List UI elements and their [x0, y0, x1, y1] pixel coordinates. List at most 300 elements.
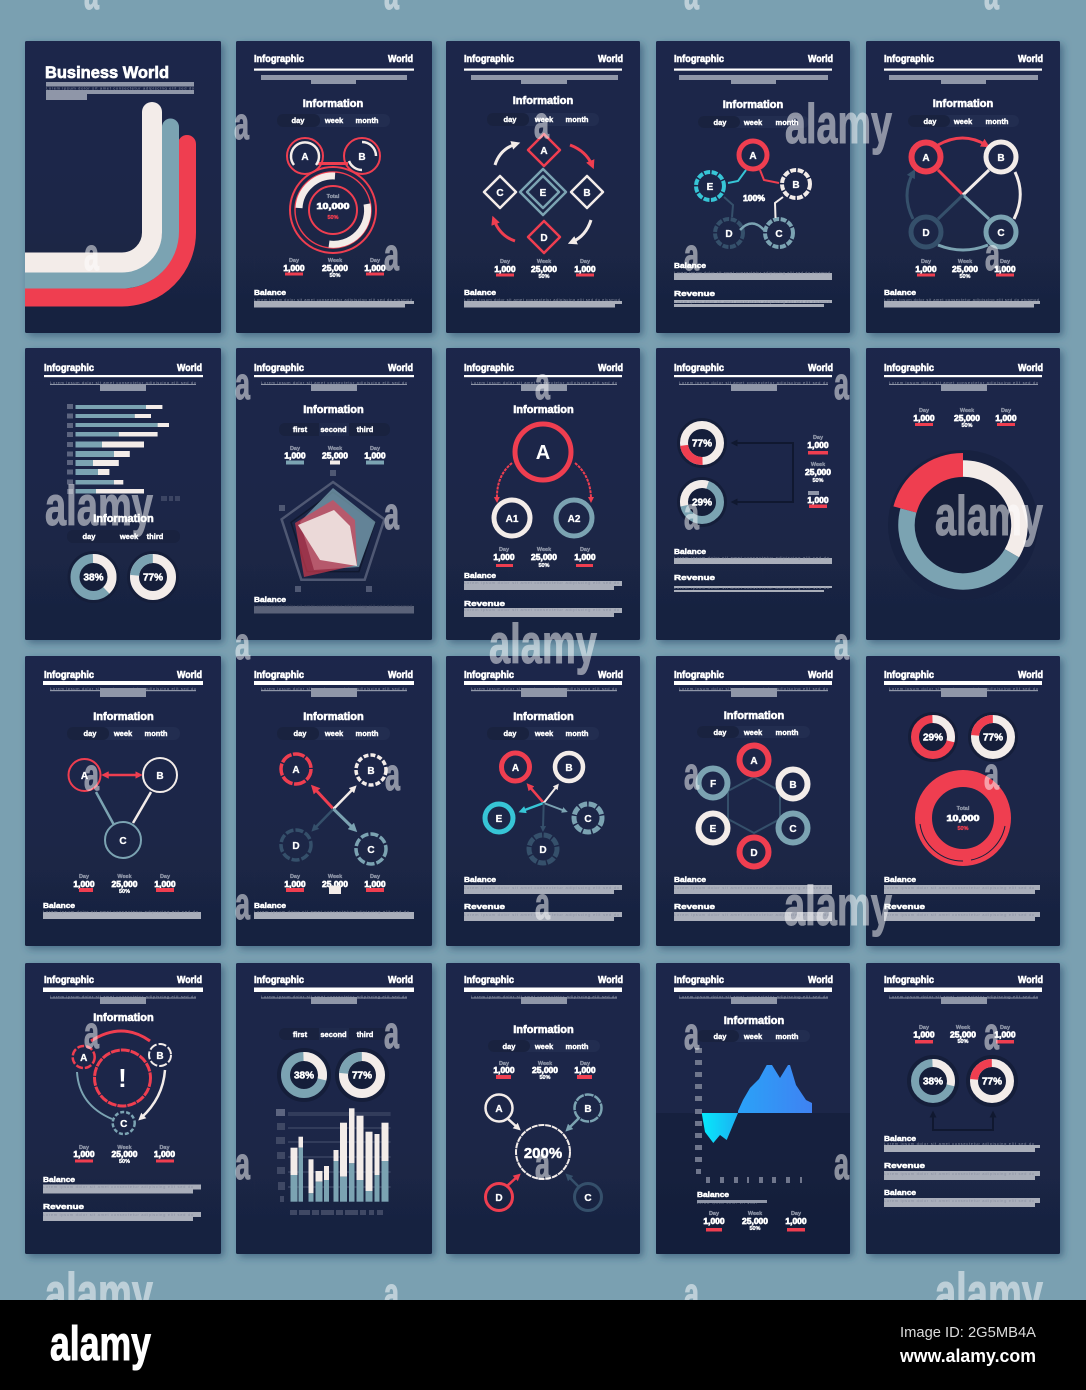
watermarks: alamy [785, 92, 892, 155]
card background [866, 41, 1060, 333]
stats trio [284, 874, 386, 894]
text: Revenue: Revenue [884, 1161, 925, 1170]
darker lower section [656, 1113, 850, 1254]
donut 29%: 29% [923, 732, 943, 744]
header [674, 54, 833, 84]
stats trio: Day [709, 1211, 720, 1217]
watermarks: a [834, 1138, 850, 1189]
text: Balance: Balance [254, 901, 286, 910]
heading: Information: Information [933, 98, 994, 110]
stats trio: 25,000 [531, 264, 557, 274]
diagram: hexagon: D [750, 848, 758, 859]
panel: two donuts with connector [656, 348, 850, 640]
text: Balance [464, 288, 622, 308]
stats trio: 1,000 [994, 1030, 1016, 1040]
header: Infographic [254, 975, 304, 986]
donut 29% [677, 477, 727, 527]
card background [25, 348, 221, 640]
panel: donuts and red ring [866, 656, 1060, 946]
watermarks: a [385, 749, 401, 800]
donut 29% [908, 712, 958, 762]
donut 38% [68, 551, 120, 603]
header: World [388, 670, 413, 681]
watermarks: a [535, 358, 551, 409]
card background [656, 963, 850, 1254]
donut 38%: 38% [294, 1070, 314, 1082]
diagram: diamonds: B [583, 188, 591, 199]
donut 29%: 29% [692, 498, 712, 508]
header: Infographic [884, 363, 934, 374]
diagram: circles and ring: 50% [327, 215, 339, 221]
text: Balance 2: Lorem ipsum dolor sit amet consectetur adipiscing elit sed do [884, 1198, 1035, 1203]
donut 77% [127, 551, 179, 603]
text: Revenue: Revenue [43, 1202, 84, 1211]
header: World [598, 363, 623, 374]
text: Revenue [674, 573, 832, 592]
diagram: orbit [73, 1031, 171, 1134]
header: Infographic [464, 670, 514, 681]
heading: Information: Information [93, 711, 154, 723]
header: World [598, 975, 623, 986]
diagram: four circles: C [997, 228, 1005, 239]
tabs: second [320, 1030, 347, 1039]
text: Revenue [464, 902, 622, 921]
header: World [1018, 54, 1043, 65]
text: Balance: Balance [254, 288, 286, 297]
stats trio: 1,000 [574, 1065, 596, 1075]
heading: Information: Information [513, 1024, 574, 1036]
diagram: hub with five circles: E [496, 814, 503, 825]
panel: cross of arrows [236, 656, 432, 946]
diagram: four dashed circles with arrows: B [367, 766, 375, 777]
stats trio: 1,000 [73, 879, 95, 889]
tabs: week [953, 117, 973, 126]
watermarks: a [384, 1007, 400, 1058]
header: Lorem ipsum dolor sit amet consectetur adipiscing elit sed do [261, 994, 408, 999]
cover card background [25, 41, 221, 333]
diagram: orbit: B [156, 1051, 164, 1062]
header: Lorem ipsum dolor sit amet consectetur adipiscing elit sed do [679, 380, 829, 385]
tabs: day [292, 116, 305, 125]
diagram: hub: A [495, 1104, 503, 1115]
tabs [279, 1028, 390, 1040]
header [254, 975, 414, 1004]
text: Revenue: Lorem ipsum dolor sit amet consectetur adipiscing elit sed do [884, 912, 1035, 917]
stats trio: Day [921, 259, 932, 265]
watermarks: a [684, 488, 700, 539]
header [43, 975, 203, 1004]
large donut [888, 450, 1038, 600]
tabs: day [504, 729, 517, 738]
arrow connector [734, 443, 793, 502]
diagram: hexagon: F [710, 779, 716, 790]
panel: concentric circles A B [236, 41, 432, 333]
heading: Information: Information [513, 711, 574, 723]
tabs: day [83, 532, 96, 541]
stats trio: Day [370, 258, 381, 264]
watermarks: a [985, 229, 1001, 280]
header: Infographic [464, 54, 514, 65]
stats trio: Week [956, 1025, 971, 1031]
header [464, 670, 623, 697]
tabs [488, 1040, 600, 1052]
header [464, 363, 623, 391]
watermarks: a [834, 618, 850, 669]
footer bar: www.alamy.com [899, 1346, 1036, 1366]
card background [236, 656, 432, 946]
stats trio: Day [499, 547, 510, 553]
tabs: week [324, 116, 344, 125]
text: Balance: Lorem ipsum dolor sit amet consectetur adipiscing elit sed do [464, 580, 620, 585]
stats trio: Day [160, 874, 171, 880]
watermarks: a [535, 1138, 551, 1189]
diagram: four dashed circles with arrows: C [367, 845, 375, 856]
stats column [805, 435, 831, 508]
diagram: hexagon: B [789, 780, 797, 791]
panel: horizontal bars and donuts [25, 348, 221, 640]
text: Balance [43, 901, 201, 919]
stats trio: 1,000 [785, 1216, 807, 1226]
stats trio: 1,000 [913, 413, 935, 423]
watermarks: alamy [45, 1261, 153, 1324]
watermarks: a [235, 618, 251, 669]
panel: tree A to A1 A2 [446, 348, 640, 640]
stats trio: Week [960, 408, 975, 414]
watermarks: a [534, 97, 550, 148]
arrow connector [933, 1114, 993, 1130]
stats column: Day [813, 435, 824, 441]
diagram: five connected circles [696, 141, 810, 247]
header: Lorem ipsum dolor sit amet consectetur adipiscing elit sed do [261, 380, 408, 385]
tabs: week [113, 729, 133, 738]
text: Balance: Lorem ipsum dolor sit amet consectetur adipiscing elit sed do [43, 909, 199, 914]
watermarks: a [834, 358, 850, 409]
tabs: month [356, 729, 379, 738]
header: Infographic [44, 975, 94, 986]
donut 77%: 77% [352, 1070, 372, 1082]
donut 38% [277, 1048, 331, 1102]
text: Balance: Lorem ipsum dolor sit amet consectetur adipiscing elit sed do [254, 909, 410, 914]
stats trio: Day [1001, 408, 1012, 414]
tabs: day [714, 118, 727, 127]
card background [446, 963, 640, 1254]
panel: diamonds cycle [446, 41, 640, 333]
stats trio: Week [328, 874, 343, 880]
header [674, 975, 833, 1004]
diagram: hexagon: E [710, 824, 717, 835]
stats trio: Day [1000, 259, 1011, 265]
stats trio: 50% [538, 563, 550, 569]
stats trio: 25,000 [112, 1149, 138, 1159]
header: Infographic [674, 975, 724, 986]
red ring [920, 778, 1005, 861]
text: Balance: Lorem ipsum dolor sit amet consectetur adipiscing elit sed do eiusmod [254, 603, 412, 608]
header: Infographic [44, 670, 94, 681]
tabs [697, 726, 810, 738]
text: Balance: Lorem ipsum dolor sit amet consectetur adipiscing elit sed do eiusmod [674, 270, 830, 275]
header [884, 363, 1043, 391]
header: World [388, 975, 413, 986]
watermarks: alamy [784, 874, 892, 937]
card background [236, 348, 432, 640]
header: Infographic [884, 670, 934, 681]
watermarks: a [684, 229, 700, 280]
stats trio: 25,000 [532, 1065, 558, 1075]
diagram: tree [494, 424, 592, 536]
heading: Information: Information [303, 711, 364, 723]
text: Balance [884, 875, 1040, 894]
card background [446, 41, 640, 333]
header [44, 363, 203, 391]
watermarks: alamy [489, 612, 597, 675]
diagram: orbit: ! [118, 1063, 127, 1093]
text: Revenue: Revenue [464, 902, 505, 911]
header [884, 670, 1043, 697]
text: Revenue: Lorem ipsum dolor sit amet consectetur adipiscing elit sed do [674, 912, 830, 917]
tabs [487, 727, 599, 740]
tabs: day [714, 728, 727, 737]
stats trio: Week [958, 259, 973, 265]
stats trio: 25,000 [742, 1216, 768, 1226]
tabs: week [534, 115, 554, 124]
tabs: month [986, 117, 1009, 126]
text: Balance: Balance [464, 288, 496, 297]
panel: four circles with cross [866, 41, 1060, 333]
stats trio: 1,000 [574, 264, 596, 274]
diagram: hub with five circles [485, 753, 602, 863]
stats trio [493, 547, 596, 569]
heading: Information: Information [723, 99, 784, 111]
card background [25, 963, 221, 1254]
stats trio: 25,000 [531, 552, 557, 562]
stats trio: Day [500, 259, 511, 265]
card background [236, 41, 432, 333]
watermarks: a [84, 749, 100, 800]
stats trio: 50% [749, 1226, 761, 1232]
text: Balance: Lorem ipsum dolor sit amet consectetur adipiscing elit sed do [884, 1141, 1035, 1146]
tabs: day [84, 729, 97, 738]
stats trio: Day [289, 258, 300, 264]
stats trio: Day [370, 874, 381, 880]
stats trio: 25,000 [112, 879, 138, 889]
stats trio: Day [580, 259, 591, 265]
diagram: triangle: B [156, 771, 164, 782]
stats trio: 25,000 [322, 450, 348, 460]
header: World [598, 54, 623, 65]
heading: Information: Information [513, 95, 574, 107]
stats trio: Day [499, 1061, 510, 1067]
stats trio: 1,000 [994, 264, 1016, 274]
stats trio: 50% [119, 1159, 130, 1165]
header: World [808, 975, 833, 986]
stats trio: 1,000 [284, 879, 306, 889]
watermarks: a [235, 1138, 251, 1189]
header [674, 670, 833, 697]
footer bar: Image ID: 2G5MB4A [900, 1324, 1036, 1341]
cover curved stripes [5, 112, 187, 298]
text: Balance 2 [884, 1188, 1040, 1207]
header [674, 363, 833, 391]
header: Lorem ipsum dolor sit amet consectetur adipiscing elit sed do [471, 686, 618, 691]
heading: Information: Information [513, 404, 574, 416]
tabs: month [566, 115, 589, 124]
tabs [908, 115, 1019, 127]
panel: area chart [656, 963, 850, 1254]
stats column: 1,000 [807, 495, 829, 505]
panel: hub with four corners [446, 963, 640, 1254]
diagram: tree: A2 [568, 514, 581, 525]
stats trio: Day [1000, 1025, 1011, 1031]
stats trio: 25,000 [952, 264, 978, 274]
header [464, 54, 623, 84]
header: World [808, 363, 833, 374]
stats trio: 1,000 [574, 552, 596, 562]
diagram: triangle [68, 758, 177, 858]
stats trio: 50% [329, 273, 341, 279]
text: Revenue: Lorem ipsum dolor sit amet consectetur adipiscing elit sed do [674, 585, 830, 590]
header: Infographic [674, 670, 724, 681]
donut 77%: 77% [692, 438, 712, 450]
diagram: hub [486, 1094, 602, 1210]
header: World [598, 670, 623, 681]
stats trio: 1,000 [154, 1149, 175, 1159]
header: Lorem ipsum dolor sit amet consectetur adipiscing elit sed do [889, 380, 1039, 385]
stats trio: 1,000 [283, 263, 305, 273]
header: Infographic [884, 54, 934, 65]
header: Infographic [464, 975, 514, 986]
text: Revenue [884, 1161, 1040, 1180]
diagram: hub with five circles: D [539, 845, 547, 856]
diagram: four dashed circles with arrows: A [292, 765, 300, 776]
stats trio: Week [117, 1145, 133, 1151]
text: Revenue [674, 902, 832, 921]
header [464, 975, 623, 1004]
header: Lorem ipsum dolor sit amet consectetur adipiscing elit sed do [50, 686, 197, 691]
diagram: orbit: A [80, 1053, 87, 1064]
text: Balance 2: Balance [884, 1188, 916, 1197]
diagram: four circles: B [997, 153, 1005, 164]
tabs: first [293, 1030, 308, 1039]
text: Revenue: Revenue [674, 902, 715, 911]
header: Infographic [464, 363, 514, 374]
text: Balance: Balance [884, 288, 916, 297]
legend text: Balance [697, 1190, 729, 1199]
text: Balance: Lorem ipsum dolor sit amet consectetur adipiscing elit sed do eiusmod [254, 297, 412, 302]
donut 77% [677, 418, 727, 468]
stats trio: Week [117, 874, 133, 880]
text: Revenue: Lorem ipsum dolor sit amet consectetur adipiscing elit sed do [464, 607, 620, 612]
cover title: Business World [45, 63, 169, 82]
text: Revenue: Lorem ipsum dolor sit amet consectetur adipiscing elit sed do [464, 912, 620, 917]
header [254, 363, 414, 391]
heading: Information: Information [93, 1012, 154, 1024]
panel: donuts and stacked bar chart [236, 963, 432, 1254]
stats trio: Day [791, 1211, 802, 1217]
diagram: hexagon: C [789, 824, 797, 835]
stats trio: Week [537, 547, 552, 553]
red ring: 50% [957, 826, 969, 832]
donut 77% [968, 712, 1018, 762]
stats trio: 1,000 [284, 450, 306, 460]
donut 77%: 77% [982, 1076, 1002, 1088]
card background [866, 963, 1060, 1254]
stats trio: Day [919, 1025, 930, 1031]
diagram: five connected circles: A [749, 151, 757, 162]
watermarks: a [684, 748, 700, 799]
text: Balance: Lorem ipsum dolor sit amet consectetur adipiscing elit sed do [674, 885, 830, 890]
watermarks: a [84, 229, 100, 280]
diagram: tree: A1 [506, 514, 519, 525]
diagram: triangle: C [119, 836, 127, 847]
header: Infographic [674, 54, 724, 65]
tabs: week [324, 729, 344, 738]
text: Balance: Balance [464, 875, 496, 884]
donut 38% [907, 1055, 959, 1107]
diagram: circles and ring: 10,000 [316, 201, 350, 211]
diagram: five connected circles: B [792, 180, 800, 191]
heading: Information: Information [724, 1015, 785, 1027]
stats trio: Day [370, 446, 381, 452]
stats trio: 1,000 [494, 264, 516, 274]
header [884, 975, 1043, 1004]
header [254, 54, 414, 84]
panel: pentagon cycle [656, 41, 850, 333]
stats trio [913, 408, 1017, 429]
diagram: four dashed circles with arrows [281, 754, 386, 864]
stats trio [73, 1145, 175, 1165]
tabs [277, 727, 390, 740]
donut 77% [966, 1055, 1018, 1107]
tabs: day [924, 117, 937, 126]
radar chart [279, 470, 384, 592]
tabs: third [357, 1030, 374, 1039]
stats trio: 50% [957, 1039, 969, 1045]
diagram: hub: D [495, 1193, 503, 1204]
text: Revenue: Revenue [464, 599, 505, 608]
card background [446, 656, 640, 946]
red ring: Total [957, 806, 970, 812]
header: Lorem ipsum dolor sit amet consectetur adipiscing elit sed do [50, 380, 197, 385]
text: Balance: Balance [674, 261, 706, 270]
header: Lorem ipsum dolor sit amet consectetur adipiscing elit sed do [889, 994, 1039, 999]
tabs: day [503, 1042, 516, 1051]
stats trio: Day [159, 1145, 170, 1151]
watermarks: a [384, 229, 400, 280]
diagram: hub: C [584, 1193, 592, 1204]
tabs [487, 113, 599, 126]
diagram: four circles: D [922, 228, 930, 239]
stats trio [493, 1061, 596, 1081]
diagram: four dashed circles with arrows: D [292, 841, 300, 852]
text: Balance: Lorem ipsum dolor sit amet consectetur adipiscing elit sed do eiusmod [884, 297, 1039, 302]
diagram: diamonds: E [540, 188, 547, 199]
text: Revenue [674, 289, 832, 307]
tabs [698, 116, 809, 128]
diagram: hub: B [584, 1104, 592, 1115]
diagram: hexagon: A [750, 756, 758, 767]
header: World [808, 54, 833, 65]
watermarks: a [384, 1268, 400, 1319]
tabs: month [356, 116, 379, 125]
stats trio: Week [538, 1061, 553, 1067]
stats trio: Week [748, 1211, 763, 1217]
watermarks: a [235, 878, 251, 929]
text: Balance: Lorem ipsum dolor sit amet consectetur adipiscing elit sed do [674, 555, 830, 560]
text: Balance [674, 261, 832, 280]
stats trio: 1,000 [703, 1216, 725, 1226]
watermarks: a [684, 1268, 700, 1319]
header: Lorem ipsum dolor sit amet consectetur adipiscing elit sed do [889, 686, 1039, 691]
